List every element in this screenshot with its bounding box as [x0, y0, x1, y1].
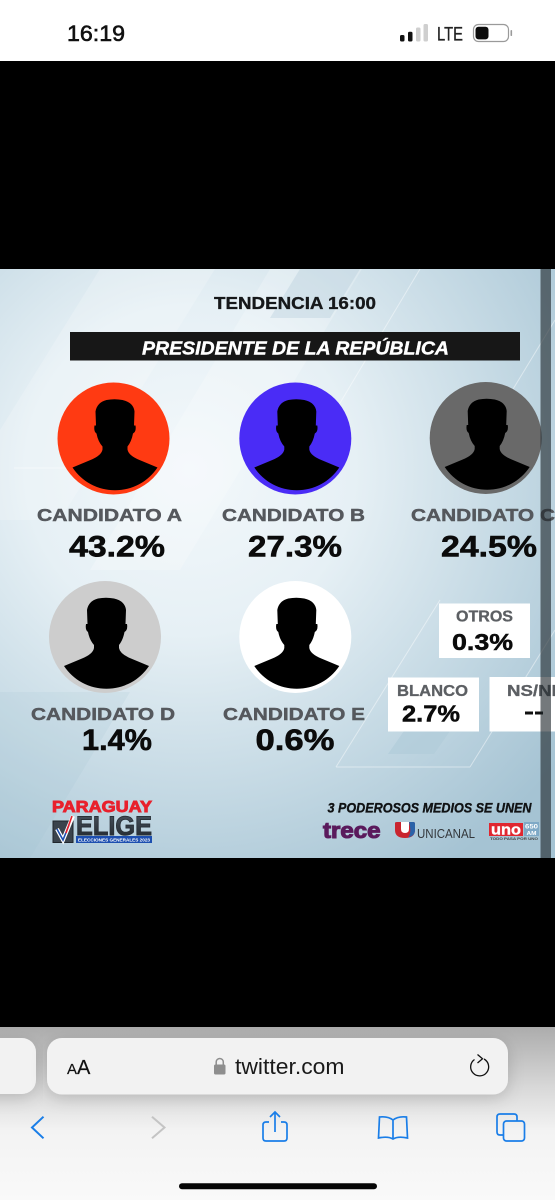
home indicator: [179, 1183, 377, 1189]
icon: lock: [214, 1058, 226, 1074]
logo: uno 650 am: TODO PASA POR UNO: [490, 837, 539, 841]
heading: tendencia: TENDENCIA 16:00: [214, 293, 376, 313]
logo: uno 650 am: [489, 822, 539, 841]
reader button: [67, 1057, 91, 1079]
name B: CANDIDATO B: [222, 505, 365, 525]
logo: uno 650 am: 650: [525, 824, 538, 830]
box: blanco: BLANCO: [397, 683, 468, 700]
signal bars: [400, 24, 428, 42]
logo: paraguay elige: ELIGE: [76, 811, 152, 841]
icon: forward: [152, 1117, 164, 1138]
candidate E: [223, 581, 365, 757]
background streaks: [14, 269, 555, 768]
name D: CANDIDATO D: [31, 704, 175, 724]
battery: [474, 24, 512, 42]
candidate D: [31, 581, 175, 757]
icon: unicanal shield: [395, 822, 415, 838]
value D: 1.4%: [82, 724, 152, 757]
black letterbox top: [0, 61, 555, 269]
value E: 0.6%: [256, 724, 334, 757]
logo: uno 650 am: uno: [491, 822, 521, 838]
logo: unicanal: UNICANAL: [417, 827, 475, 841]
panel background: [0, 269, 555, 858]
box: otros: 0.3%: [452, 629, 513, 655]
icon: ballot check: [53, 816, 73, 842]
value A: 43.2%: [69, 531, 165, 564]
icon: bookmarks: [378, 1117, 408, 1139]
icon: back: [32, 1117, 44, 1138]
candidate B: [222, 382, 365, 564]
box: ns/nr: NS/NR: [507, 683, 555, 700]
clock: 16:19: [67, 21, 125, 46]
icon: tabs: [497, 1114, 524, 1141]
toolbar background: [0, 1027, 555, 1200]
dark vertical strip: [540, 269, 551, 858]
reader button: A: [77, 1057, 91, 1079]
name E: CANDIDATO E: [223, 704, 365, 724]
box: blanco: [388, 678, 479, 732]
portrait A: [58, 382, 170, 494]
media tagline: 3 PODEROSOS MEDIOS SE UNEN: [328, 800, 532, 815]
box: blanco: 2.7%: [402, 701, 460, 727]
candidate C: [411, 382, 555, 564]
logo: paraguay elige: ELECCIONES GENERALES 2023: [78, 837, 150, 842]
black letterbox bottom: [0, 858, 555, 1027]
name A: CANDIDATO A: [37, 505, 182, 525]
name C: CANDIDATO C: [411, 505, 555, 525]
portrait D: [49, 581, 161, 693]
logo: paraguay elige: [52, 799, 152, 843]
url: twitter.com: [235, 1054, 344, 1079]
candidate A: [37, 382, 182, 564]
logo: uno 650 am: AM: [526, 831, 537, 837]
portrait E: [239, 581, 351, 693]
logo: trece: trece: [323, 818, 380, 843]
value C: 24.5%: [441, 531, 537, 564]
value B: 27.3%: [248, 531, 342, 564]
network label: LTE: [437, 24, 463, 46]
icon: share: [263, 1112, 287, 1141]
reader button: A: [67, 1061, 77, 1078]
logo: unicanal: [395, 822, 475, 838]
previous tab pill: [0, 1038, 36, 1094]
icon: reload: [471, 1054, 489, 1076]
heading: presidente de la república: PRESIDENTE DE LA REPÚBLICA: [142, 338, 449, 358]
portrait B: [239, 382, 351, 494]
status bar: [0, 0, 555, 61]
logo: paraguay elige: PARAGUAY: [52, 799, 152, 816]
infographic panel: [0, 269, 555, 858]
box: otros: OTROS: [456, 609, 513, 626]
portrait C: [430, 382, 542, 494]
box: otros: [439, 604, 530, 658]
address bar: [47, 1038, 508, 1094]
box: ns/nr: [490, 677, 555, 732]
heading: presidente de la república: [70, 332, 520, 360]
browser chrome: [0, 1027, 555, 1200]
